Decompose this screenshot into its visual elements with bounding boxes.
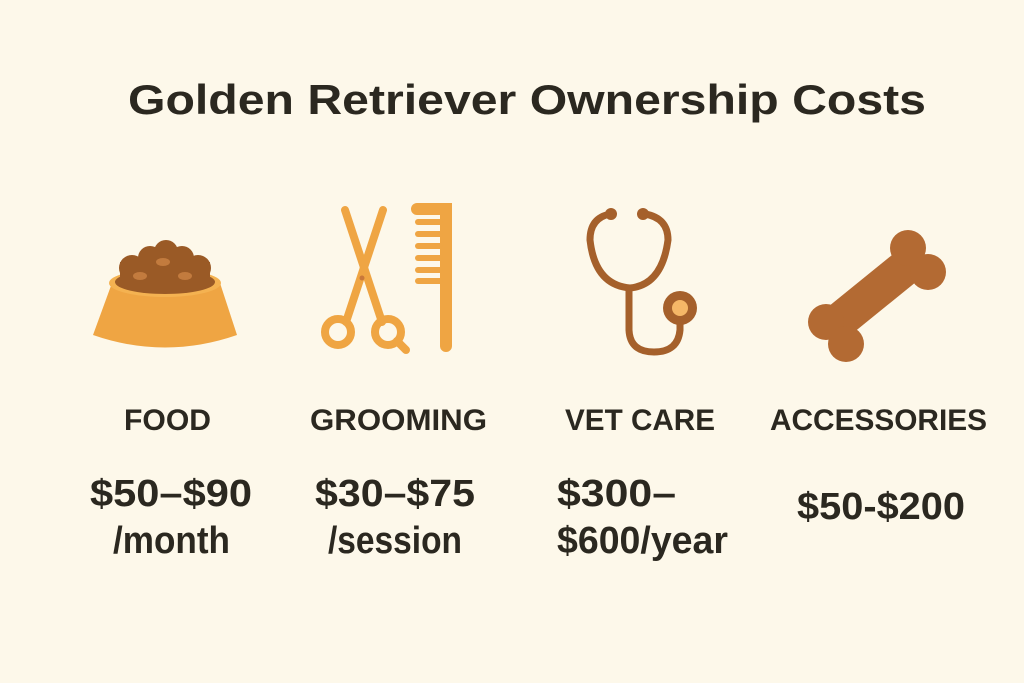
label: accessories: ACCESSORIES [770, 404, 987, 437]
panel: vet care: $600/year [557, 520, 728, 562]
panel: food [90, 240, 252, 562]
panel: grooming: /session [328, 520, 462, 562]
price: grooming: $30–$75 [315, 473, 475, 515]
icon: scissors [325, 210, 406, 350]
title: Golden Retriever Ownership Costs [128, 76, 926, 123]
label: vet care: VET CARE [565, 404, 715, 437]
panel: accessories [770, 230, 987, 528]
panel: grooming [310, 209, 487, 562]
icon: comb [417, 209, 446, 346]
icon: stethoscope [590, 208, 697, 352]
label: food: FOOD [124, 404, 211, 437]
icon: bone [808, 230, 946, 362]
price: accessories: $50-$200 [797, 486, 965, 528]
panel: vet care [557, 208, 728, 562]
price: vet care: $300– [557, 473, 676, 515]
price: food: $50–$90 [90, 473, 252, 515]
label: grooming: GROOMING [310, 404, 487, 437]
panel: food: /month [113, 520, 230, 562]
icon: food bowl [93, 240, 237, 348]
